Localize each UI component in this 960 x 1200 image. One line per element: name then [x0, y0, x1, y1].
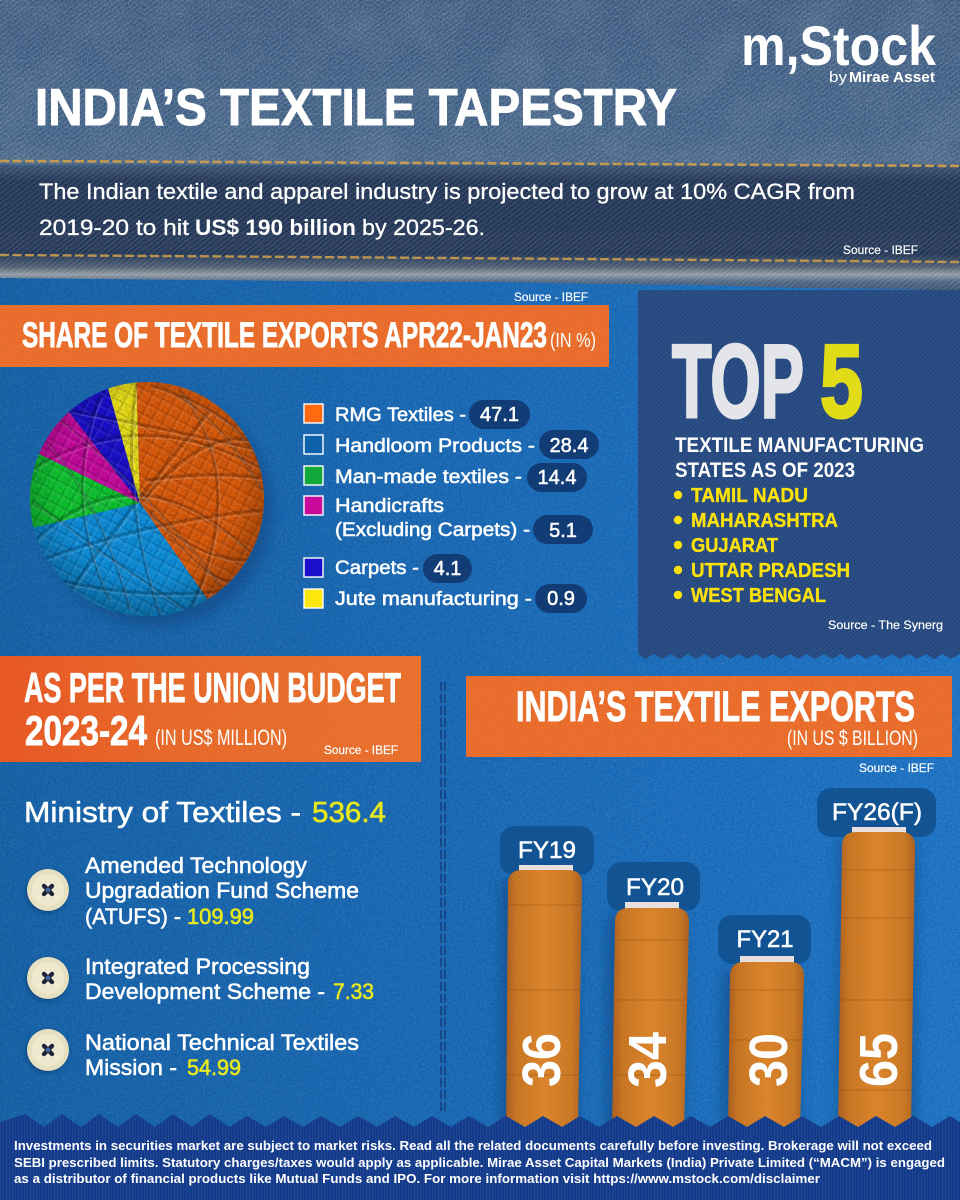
- footer: disclaimer: [0, 1114, 960, 1200]
- footer: disclaimer: Investments in securities market are subject to market risks. Read all the related documents carefully before investing. Brokerage will not exceed: [14, 1138, 932, 1153]
- subheading: STATES AS OF 2023: [675, 459, 855, 482]
- heading banner: share of textile exports: SHARE OF TEXTILE EXPORTS APR22-JAN23: [22, 316, 547, 355]
- legend item: RMG Textiles: RMG Textiles -: [335, 404, 466, 426]
- heading banner: textile exports: [466, 676, 952, 757]
- budget item: integrated processing: Integrated Processing: [85, 954, 310, 979]
- legend item: Man-made textiles: [304, 463, 587, 492]
- intro text: 2019-20 to hit: [39, 215, 190, 240]
- legend item: Handicrafts: Handicrafts: [335, 495, 444, 517]
- bar: FY19: [500, 826, 594, 1130]
- pie chart: yarn ball: [30, 382, 276, 630]
- legend item: RMG Textiles: [304, 400, 530, 429]
- budget item: national technical textiles: 54.99: [187, 1055, 241, 1080]
- legend item: Jute manufacturing: Jute manufacturing -: [335, 588, 532, 610]
- legend item: Jute manufacturing: 0.9: [547, 588, 575, 610]
- bar: FY26(F): FY26(F): [832, 799, 922, 826]
- states list: [674, 485, 850, 607]
- logo: m.Stock: by: [829, 69, 848, 86]
- bar: FY21: [718, 915, 811, 1130]
- bar: FY19: 36: [512, 1033, 572, 1087]
- heading banner: share of textile exports: [0, 305, 609, 367]
- intro text: by 2025-26.: [362, 215, 485, 240]
- states list: TAMIL NADU: [691, 485, 808, 507]
- legend item: Handloom Products: [304, 430, 599, 459]
- top 5 heading: TOP: [672, 324, 804, 440]
- legend item: Carpets: Carpets -: [335, 557, 419, 579]
- budget item: ATUFS: Amended Technology: [85, 853, 308, 878]
- heading banner: union budget: Source - IBEF: [324, 743, 398, 757]
- panel: denim header: [0, 0, 960, 292]
- legend item: Carpets: [304, 554, 472, 583]
- states list: GUJARAT: [691, 535, 778, 557]
- states list: UTTAR PRADESH: [691, 560, 850, 582]
- heading banner: union budget: [0, 656, 421, 762]
- budget item: national technical textiles: National Technical Textiles: [85, 1030, 359, 1055]
- legend item: Jute manufacturing: [304, 584, 587, 613]
- bar chart: thread spools: [500, 788, 936, 1130]
- budget item: integrated processing: 7.33: [333, 979, 374, 1004]
- bar: FY20: [606, 862, 700, 1130]
- ministry total: Ministry of Textiles -: [24, 797, 301, 829]
- subheading: [675, 434, 924, 482]
- heading banner: union budget: (IN US$ MILLION): [155, 725, 287, 750]
- budget item: integrated processing: Development Scheme -: [85, 979, 325, 1004]
- legend item: RMG Textiles: 47.1: [480, 404, 519, 426]
- heading banner: textile exports: (IN US $ BILLION): [787, 727, 918, 750]
- ministry total: 536.4: [312, 797, 386, 829]
- bar: FY26(F): [817, 788, 936, 1130]
- top 5 heading: 5: [820, 324, 863, 440]
- bar: FY26(F): 65: [849, 1033, 909, 1087]
- icon: button: [26, 957, 69, 1001]
- intro text: US$ 190 billion: [195, 215, 356, 240]
- legend item: Handicrafts: 5.1: [549, 520, 577, 542]
- heading banner: share of textile exports: (IN %): [550, 330, 596, 352]
- bar: FY21: 30: [739, 1033, 799, 1087]
- budget item: ATUFS: 109.99: [187, 904, 254, 929]
- heading banner: union budget: 2023-24: [25, 707, 148, 754]
- heading banner: union budget: AS PER THE UNION BUDGET: [24, 664, 401, 711]
- legend item: Handloom Products: 28.4: [550, 435, 588, 457]
- legend: [304, 400, 599, 613]
- bar: FY21: FY21: [736, 926, 794, 953]
- dashed divider: [441, 682, 445, 1112]
- title: INDIA’S TEXTILE TAPESTRY: [35, 79, 677, 137]
- intro text: [39, 179, 855, 240]
- source note: Source - IBEF: [859, 761, 934, 775]
- budget item: ATUFS: (ATUFS) -: [85, 904, 181, 929]
- legend item: Handicrafts: [304, 495, 593, 544]
- subheading: TEXTILE MANUFACTURING: [675, 434, 924, 457]
- legend item: Carpets: 4.1: [434, 558, 461, 580]
- legend item: Man-made textiles: Man-made textiles -: [335, 466, 522, 488]
- logo: m.Stock: Mirae Asset: [849, 69, 935, 86]
- bar: FY20: FY20: [626, 874, 684, 901]
- budget item: national technical textiles: [26, 1029, 359, 1080]
- intro text: The Indian textile and apparel industry is projected to grow at 10% CAGR from: [39, 179, 855, 204]
- source note: Source - IBEF: [514, 290, 588, 304]
- legend item: Handloom Products: Handloom Products -: [335, 435, 535, 457]
- source note: Source - IBEF: [843, 243, 918, 257]
- logo: m.Stock: m,Stock: [741, 14, 937, 77]
- bar: FY19: FY19: [518, 837, 576, 864]
- panel: top 5 states: [638, 290, 960, 659]
- footer: disclaimer: as a distributor of financial products like Mutual Funds and IPO. For more information visit https://www.mstock.com/disclaimer: [14, 1171, 820, 1186]
- budget item: integrated processing: [26, 954, 374, 1004]
- footer: disclaimer: SEBI prescribed limits. Statutory charges/taxes would apply as applicable. Mirae Asset Capital Markets (India) Private Limited (“MACM”) is engaged: [14, 1155, 945, 1170]
- budget item: ATUFS: Upgradation Fund Scheme: [85, 878, 359, 903]
- icon: button: [26, 869, 69, 913]
- source note: Source - The Synerg: [828, 618, 943, 632]
- states list: MAHARASHTRA: [691, 510, 838, 532]
- budget item: national technical textiles: Mission -: [85, 1055, 177, 1080]
- icon: button: [26, 1029, 69, 1073]
- legend item: Handicrafts: (Excluding Carpets) -: [335, 519, 530, 541]
- budget item: ATUFS: [26, 853, 359, 929]
- legend item: Man-made textiles: 14.4: [538, 467, 576, 489]
- bar: FY20: 34: [618, 1032, 678, 1088]
- states list: WEST BENGAL: [691, 585, 826, 607]
